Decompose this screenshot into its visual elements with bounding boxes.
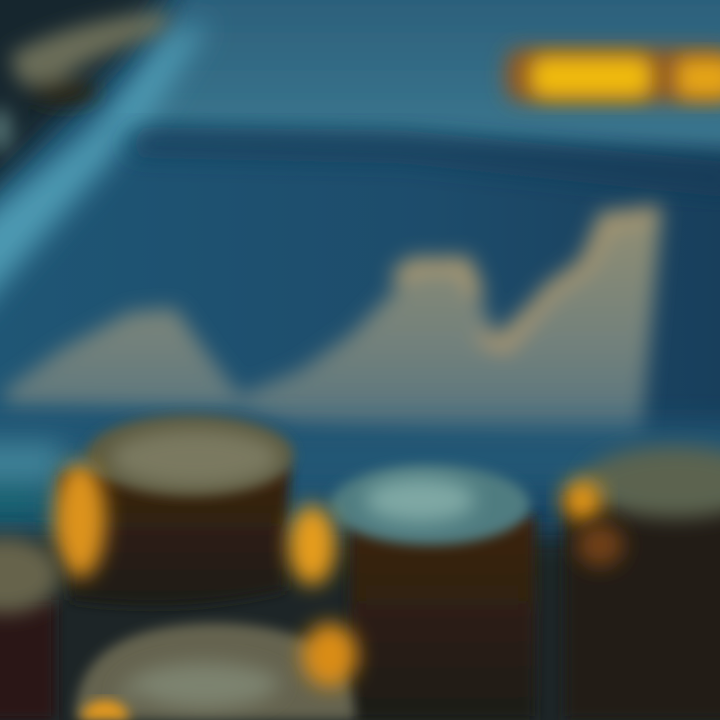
dark table floor <box>0 535 720 720</box>
coin stack: left <box>54 415 294 606</box>
coin stack: far left <box>0 537 60 720</box>
coin stack: center <box>288 465 535 720</box>
light blue diagonal streak <box>0 20 210 320</box>
upper band <box>120 0 720 150</box>
top left blurred object <box>0 10 170 152</box>
yellow glowing bar <box>505 48 720 102</box>
top left dark corner <box>0 0 185 220</box>
mountain line chart <box>5 206 662 450</box>
coin stack: right <box>562 446 720 720</box>
dark horizontal shadow band <box>125 135 720 190</box>
floor base <box>0 590 720 720</box>
coin stack: bottom front <box>75 623 358 720</box>
lower table band <box>0 425 720 520</box>
